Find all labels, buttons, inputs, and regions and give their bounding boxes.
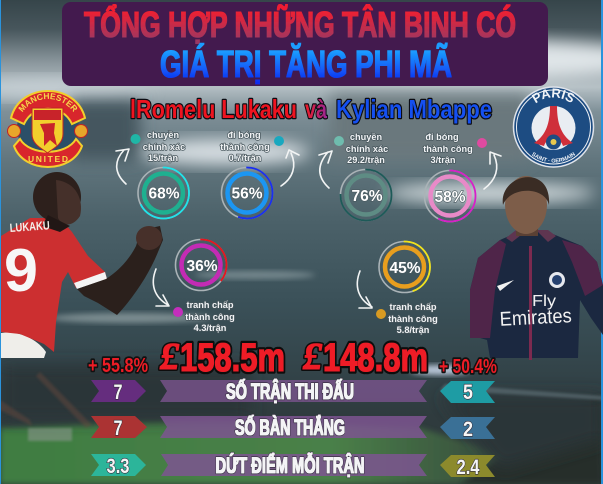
Lukaku value [91,454,146,478]
subtitle: player names [130,94,492,124]
icon: Manchester United crest: MANCHESTER [18,93,78,112]
label: chuyền [147,130,179,140]
label: thành công [185,312,235,322]
Lukaku value: 3.3 [106,455,130,478]
Lukaku value: 7 [114,417,122,440]
row: dứt điểm mỗi trận [91,452,495,479]
Mbappe transfer value [302,336,428,380]
player: Romelu Lukaku: LUKAKU [9,218,50,235]
Mbappe value: 2 [463,418,473,441]
icon: PSG crest: SAINT · GERMAIN [532,152,576,163]
Mbappe change percent: + 50.4% [439,356,497,378]
icon: PSG crest: PARIS [532,88,575,104]
player: Kylian Mbappe: Fly [532,293,556,310]
ring: 58%: 58% [434,189,466,206]
label: đi bóng [425,132,459,142]
Mbappe value [440,381,495,404]
ring: 36%: 36% [186,258,218,275]
stat: Mbappe tranh chấp thành công [357,242,438,335]
ring: 76%: 76% [351,188,383,205]
ring: 68%: 68% [148,186,180,202]
Mbappe value [440,417,495,441]
row label: SỐ BÀN THẮNG [235,414,345,440]
label: 29.2/trận [347,155,385,165]
title line 2: GIÁ TRỊ TĂNG PHI MÃ [160,42,452,86]
row label [160,414,427,440]
ring: 45%: 45% [389,260,421,277]
label: tranh chấp [390,302,437,312]
label: chuyền [350,132,382,142]
row: số bàn thắng [91,414,495,441]
Lukaku transfer value: £ [159,336,180,378]
row label: DỨT ĐIỂM MỖI TRẬN [216,452,364,478]
player: Kylian Mbappe [470,176,603,360]
title panel [62,2,548,86]
stat: Lukaku đi bóng thành công [220,130,299,218]
label: 5.8/trận [397,325,430,335]
Mbappe value: 2.4 [456,456,480,479]
Mbappe value: 5 [463,381,473,404]
row: số trận thi đấu [91,378,495,404]
row label [160,378,427,404]
Lukaku value [91,380,146,404]
stat: Lukaku tranh chấp thành công [153,240,235,333]
label: 3/trận [430,155,456,165]
label: 4.3/trận [194,323,227,333]
subtitle: player names: Kylian Mbappe [336,94,492,124]
row label: SỐ TRẬN THI ĐẤU [226,378,354,404]
player: Kylian Mbappe: Emirates [499,305,572,331]
label: thành công [388,314,438,324]
stat: Lukaku chuyền chính xác [116,130,189,218]
stat: Mbappe chuyền chính xác [319,132,392,220]
subtitle: player names: và [305,94,327,124]
label: chính xác [346,144,388,154]
Mbappe value [440,455,495,479]
icon: PSG crest [512,86,594,168]
Lukaku value: 7 [114,381,122,404]
icon: Manchester United crest [7,90,88,168]
icon: Manchester United crest: UNITED [28,154,68,164]
ring: 56%: 56% [231,186,263,202]
label: 15/trận [148,153,178,163]
label: thành công [220,142,270,152]
subtitle: player names: lRomelu Lukaku [130,94,297,124]
label: chính xác [143,142,185,152]
Lukaku transfer value [159,336,285,380]
Lukaku change percent: + 55.8% [88,355,148,377]
player: Romelu Lukaku [1,172,163,358]
label: 0.7/trận [229,153,262,163]
stat: Mbappe đi bóng thành công [423,132,501,222]
label: đi bóng [227,130,261,140]
Lukaku value [91,416,147,440]
Lukaku transfer value: 158.5m [180,336,285,380]
label: thành công [423,144,473,154]
Mbappe transfer value: £ [302,336,323,378]
label: tranh chấp [187,300,234,310]
Mbappe transfer value: 148.8m [323,336,428,380]
player: Romelu Lukaku: 9 [4,237,38,304]
